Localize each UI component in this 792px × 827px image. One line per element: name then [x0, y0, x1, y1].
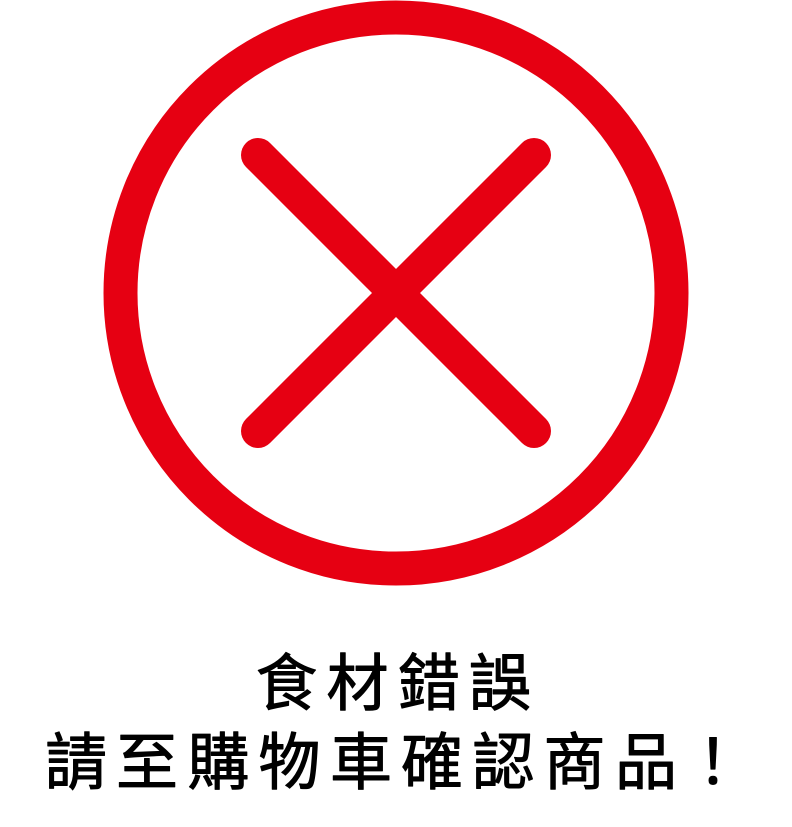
text block: check shopping cart instruction: 請至購物車確認商品！: [45, 729, 744, 798]
icon: red circle ring: [120, 18, 672, 568]
icon: red circle with X: [120, 18, 672, 568]
icon: red X mark: [258, 155, 534, 431]
heading: wrong ingredients message: 食材錯誤: [256, 650, 531, 719]
